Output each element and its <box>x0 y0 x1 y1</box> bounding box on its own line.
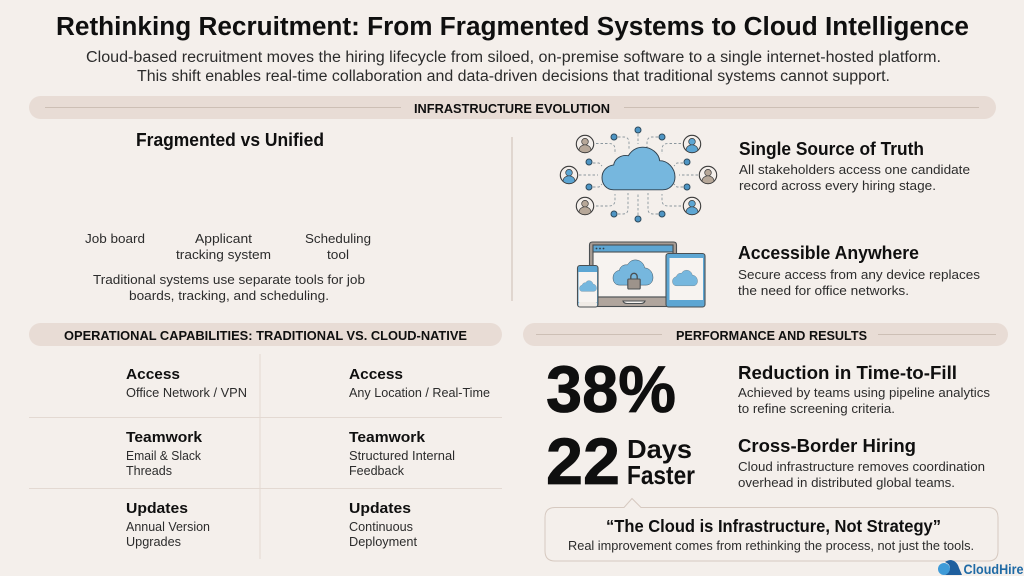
section banner: operational capabilities: OPERATIONAL CAPABILITIES: TRADITIONAL VS. CLOUD-NATIVE <box>64 328 467 343</box>
row: updates cloud-native: Continuous <box>349 519 413 534</box>
icon: cloud network with people <box>560 127 717 222</box>
stat: 22 days faster: Faster <box>627 460 695 490</box>
label: scheduling tool: Scheduling <box>305 231 371 246</box>
text block: accessible anywhere: Secure access from any device replaces <box>738 267 981 282</box>
row: access traditional <box>126 366 247 400</box>
row: updates cloud-native: Deployment <box>349 534 417 549</box>
description: traditional systems <box>93 272 365 303</box>
row: updates traditional <box>126 500 210 549</box>
panel: fragmented vs unified <box>85 130 371 303</box>
text block: reduction in time-to-fill: Achieved by teams using pipeline analytics <box>738 385 991 400</box>
section banner: performance and results: PERFORMANCE AND RESULTS <box>676 328 867 343</box>
label: job board: Job board <box>85 231 145 246</box>
label: applicant tracking system <box>176 231 271 262</box>
text block: single source of truth: All stakeholders access one candidate <box>739 162 970 177</box>
text block: accessible anywhere: Accessible Anywhere <box>738 243 919 263</box>
row: teamwork traditional <box>126 429 203 478</box>
row: teamwork cloud-native: Structured Internal <box>349 448 455 463</box>
comparison: traditional column <box>126 366 247 549</box>
intro text: Cloud-based recruitment moves the hiring lifecycle from siloed, on-premise software to a single internet-hosted platform. <box>86 49 941 66</box>
row: access cloud-native: Access <box>349 366 403 383</box>
text block: cross-border hiring: overhead in distributed global teams. <box>738 475 955 490</box>
label: applicant tracking system: Applicant <box>195 231 252 246</box>
text block: accessible anywhere <box>738 243 981 298</box>
row: updates traditional: Annual Version <box>126 519 210 534</box>
row: teamwork cloud-native: Teamwork <box>349 429 426 446</box>
text block: single source of truth: record across every hiring stage. <box>739 178 936 193</box>
text block: reduction in time-to-fill <box>738 363 991 416</box>
row: updates traditional: Updates <box>126 500 188 517</box>
row: updates cloud-native <box>349 500 417 549</box>
section banner: infrastructure evolution: INFRASTRUCTURE EVOLUTION <box>414 101 610 116</box>
row: teamwork traditional: Email & Slack <box>126 448 201 463</box>
text block: reduction in time-to-fill: to refine screening criteria. <box>738 401 895 416</box>
row: updates cloud-native: Updates <box>349 500 411 517</box>
label: scheduling tool: tool <box>327 247 349 262</box>
title: Rethinking Recruitment: From Fragmented Systems to Cloud Intelligence <box>56 13 969 41</box>
text block: accessible anywhere: the need for office networks. <box>738 283 909 298</box>
callout: the cloud is infrastructure: “The Cloud is Infrastructure, Not Strategy” <box>606 516 941 536</box>
row: updates traditional: Upgrades <box>126 534 181 549</box>
comparison: cloud-native column <box>349 366 490 549</box>
description: traditional systems: Traditional systems use separate tools for job <box>93 272 365 287</box>
row: teamwork cloud-native <box>349 429 455 478</box>
stat: 38%: 38% <box>546 352 676 426</box>
text block: single source of truth: Single Source of Truth <box>739 139 924 159</box>
label: scheduling tool <box>305 231 371 262</box>
row: teamwork cloud-native: Feedback <box>349 463 404 478</box>
stat: 22 days faster <box>546 424 695 498</box>
callout: the cloud is infrastructure <box>545 498 998 561</box>
callout: the cloud is infrastructure: Real improvement comes from rethinking the process, not just the tools. <box>568 538 974 553</box>
description: traditional systems: boards, tracking, and scheduling. <box>129 288 329 303</box>
row: teamwork traditional: Teamwork <box>126 429 203 446</box>
row: access cloud-native <box>349 366 490 400</box>
stat: 22 days faster: Days <box>627 434 692 464</box>
text block: single source of truth <box>739 139 970 193</box>
section banner: operational capabilities <box>29 323 502 346</box>
intro text <box>86 49 941 85</box>
intro text: This shift enables real-time collaboration and data-driven decisions that traditional systems cannot support. <box>137 68 890 85</box>
logo: CloudHire <box>938 560 1024 576</box>
section banner: infrastructure evolution <box>29 96 996 119</box>
label: applicant tracking system: tracking system <box>176 247 271 262</box>
row: access traditional: Access <box>126 366 180 383</box>
section banner: performance and results <box>523 323 1008 346</box>
text block: cross-border hiring: Cross-Border Hiring <box>738 436 916 456</box>
icon: devices with secure cloud <box>578 242 705 307</box>
row: access cloud-native: Any Location / Real-Time <box>349 385 490 400</box>
text block: cross-border hiring: Cloud infrastructure removes coordination <box>738 459 985 474</box>
heading: fragmented vs unified: Fragmented vs Unified <box>136 130 324 150</box>
text block: cross-border hiring <box>738 436 985 490</box>
stat: 22 days faster: 22 <box>546 424 620 498</box>
text block: reduction in time-to-fill: Reduction in Time-to-Fill <box>738 363 957 383</box>
row: access traditional: Office Network / VPN <box>126 385 247 400</box>
row: teamwork traditional: Threads <box>126 463 172 478</box>
